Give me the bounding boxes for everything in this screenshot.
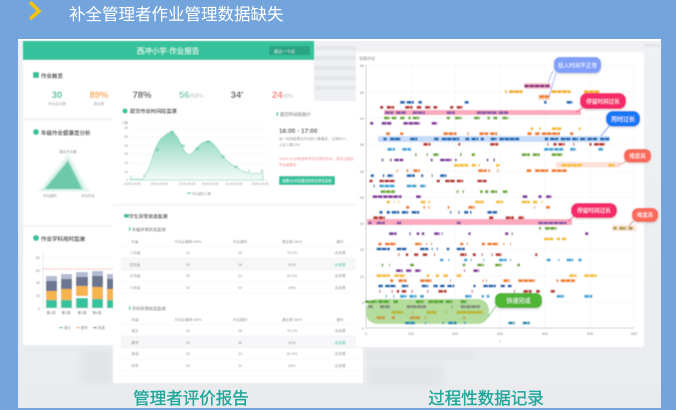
area chart: submission time: 0 xyxy=(126,178,128,182)
table: subject anomalies: 28 xyxy=(238,329,242,333)
table: grade anomalies: 69% xyxy=(288,286,296,290)
heading: top title xyxy=(30,2,284,24)
area chart: submission time: 7 xyxy=(248,169,250,173)
area chart: submission time: 人数 xyxy=(122,120,129,125)
stats overview: 作业概览 xyxy=(41,72,64,80)
callout: abnormal start time xyxy=(548,57,601,97)
chart grid and axes: 15 xyxy=(360,248,364,252)
table: subject anomalies: 34 xyxy=(238,341,242,345)
callout: long dwell time lower: 停留时间过长 xyxy=(577,206,611,214)
table: grade anomalies: 去处理 xyxy=(335,285,346,290)
caption: management report: 管理者评价报告 xyxy=(133,389,249,408)
stacked bar chart: 40 xyxy=(36,281,40,285)
highlight bands xyxy=(366,83,636,324)
table: grade anomalies: 平均正确率<60% xyxy=(174,239,202,244)
table: grade anomalies: 三年级 xyxy=(130,250,141,255)
table: grade anomalies: 34 xyxy=(238,263,242,267)
table: grade anomalies: 35 xyxy=(186,274,190,278)
table: subject anomalies: 英语 xyxy=(131,351,139,356)
stats overview: 78% xyxy=(132,90,152,101)
callout: too long duration xyxy=(601,111,640,136)
callout: long dwell time lower xyxy=(568,203,617,221)
submission time stats: 占总人数22% xyxy=(279,142,300,147)
area chart: submission time: 8 xyxy=(261,169,263,173)
table: subject anomalies: 34 xyxy=(186,341,190,345)
area chart: submission time xyxy=(122,107,269,196)
chart grid and axes: 0 xyxy=(365,332,367,336)
area chart: submission time: 35 xyxy=(155,148,159,152)
submission time stats: 作业量是否 xyxy=(279,162,297,167)
table: subject anomalies: 提交率<80% xyxy=(282,317,303,322)
area chart: submission time: 1 xyxy=(130,175,132,179)
panel: process data scatter chart xyxy=(356,52,658,347)
stacked bar chart: 60 xyxy=(36,269,40,273)
area chart: submission time: 40 xyxy=(124,144,128,148)
callout: difficulty high: 难度高 xyxy=(629,152,646,160)
stacked bar chart: 第4周 xyxy=(92,310,102,315)
table: grade anomalies: 91 xyxy=(186,251,190,255)
header bar: 最近一个月 xyxy=(274,48,295,55)
table: grade anomalies: 62% xyxy=(288,263,296,267)
area chart: submission time: 作业提交人数 xyxy=(192,191,212,196)
stacked bar chart: 20 xyxy=(36,294,40,298)
table: subject anomalies: 33 xyxy=(238,352,242,356)
table: grade anomalies: 62.4% xyxy=(287,274,298,278)
table: subject anomalies: 62.4% xyxy=(287,352,298,356)
chart grid and axes: t xyxy=(499,339,501,343)
callout: difficulty high lower: 难度高 xyxy=(637,211,654,219)
stacked bar chart: 数学 xyxy=(81,325,88,330)
callout: difficulty high lower xyxy=(629,208,658,226)
radar chart: 作业超时 xyxy=(43,193,57,198)
icon: yellow chevron xyxy=(30,2,39,19)
stacked bar chart: 语文 xyxy=(64,325,71,330)
area chart: submission time: 60 xyxy=(124,126,128,130)
chart grid and axes: 0 xyxy=(362,327,364,331)
radar chart: 年级作业健康度分析 xyxy=(41,129,91,137)
chart grid and axes: 50 xyxy=(360,64,364,68)
table: grade anomalies: 去处理 xyxy=(335,250,346,255)
table: grade anomalies: 33 xyxy=(238,274,242,278)
table: subject anomalies: 去处理 xyxy=(335,340,346,345)
panel: management report back card xyxy=(23,41,314,345)
scatter ticks lower rows xyxy=(365,207,633,323)
chart grid and axes: 10 xyxy=(360,275,364,279)
header bar xyxy=(23,41,314,60)
table: subject anomalies: 作业超时 xyxy=(233,317,248,322)
table: subject anomalies: 34 xyxy=(238,364,242,368)
table: subject anomalies: 去处理 xyxy=(335,351,346,356)
area chart: submission time: 13:00-14:00 xyxy=(123,182,141,186)
table: grade anomalies: 34 xyxy=(238,286,242,290)
table: subject anomalies: 语文 xyxy=(131,328,139,333)
table: subject anomalies: 操作 xyxy=(336,317,344,322)
submission time stats: 16:00 - 17:00 xyxy=(279,128,318,135)
chart grid and axes: 35 xyxy=(360,143,364,147)
chart grid and axes: 100 xyxy=(408,332,414,336)
stacked bar chart: 英语 xyxy=(98,325,105,330)
stats overview: 34' xyxy=(231,90,243,101)
area chart: submission time: 56 xyxy=(170,130,174,134)
table: grade anomalies: 操作 xyxy=(336,239,344,244)
table: subject anomalies: 34 xyxy=(186,364,190,368)
caption: process data: 过程性数据记录 xyxy=(428,389,544,408)
submission time stats: 23:00-24:00依然有学生在提交作业，请关注相关 xyxy=(279,156,354,161)
stats overview: 提交率 xyxy=(94,101,105,106)
stacked bar chart: 80 xyxy=(36,256,40,260)
table: grade anomalies: 学生异常状态监测 xyxy=(129,213,168,220)
panel: management report front card xyxy=(113,101,363,383)
table: grade anomalies: 去处理 xyxy=(335,262,346,267)
stacked bar chart: 作业学科用时监测 xyxy=(41,235,86,243)
area chart: submission time: 15:00-16:00 xyxy=(150,182,168,186)
stacked bar chart: 第3周 xyxy=(77,310,87,315)
callout: fast completion xyxy=(488,293,542,317)
table: grade anomalies: 34 xyxy=(186,286,190,290)
submission time stats: 这一时间段提交作业的人数最多，达到59人， xyxy=(279,136,349,141)
table: subject anomalies: 35 xyxy=(186,352,190,356)
callout: long dwell time: 停留时间过长 xyxy=(586,98,620,106)
submission time stats: 提交时间段统计 xyxy=(280,111,311,118)
radar chart: 作业作业 xyxy=(81,193,95,198)
chart grid and axes: 600 xyxy=(631,332,637,336)
callout: abnormal start time: 投入时间不正常 xyxy=(558,62,597,70)
area chart: submission time: 17:00-18:00 xyxy=(178,182,196,186)
chart grid and axes: 25 xyxy=(360,196,364,200)
stats overview: 89% xyxy=(89,90,109,101)
stacked bar chart: 第2周 xyxy=(61,310,71,315)
stacked bar chart: 0 xyxy=(38,307,40,311)
area chart: submission time: 21:00-22:00 xyxy=(225,182,243,186)
area chart: submission time: 45 xyxy=(206,140,210,144)
table: grade anomalies: 四年级 xyxy=(130,262,141,267)
submission time stats xyxy=(276,111,354,185)
table: subject anomalies: 去处理 xyxy=(335,328,346,333)
radar chart: 题目不合格 xyxy=(60,149,77,154)
table: grade anomalies: 34 xyxy=(186,263,190,267)
area chart: submission time: 26 xyxy=(221,155,225,159)
chart grid and axes: 45 xyxy=(360,91,364,95)
callout: fast completion: 快速完成 xyxy=(506,297,531,305)
area chart: submission time: 16 xyxy=(234,165,238,169)
table: subject anomalies: 数学 xyxy=(131,340,139,345)
callout: long dwell time xyxy=(576,93,626,112)
table: subject anomalies: 91 xyxy=(186,329,190,333)
table: subject anomalies: 学科异常状态监测 xyxy=(132,305,166,312)
chart grid and axes: 200 xyxy=(452,332,458,336)
table: grade anomalies: 年级异常状态监测 xyxy=(132,226,166,233)
table: grade anomalies: 五年级 xyxy=(130,273,141,278)
area chart: submission time: 38 xyxy=(195,147,199,151)
chart grid and axes xyxy=(360,64,637,343)
table: subject anomalies xyxy=(121,305,363,371)
area chart: submission time: 19:00-20:00 xyxy=(201,182,219,186)
table: subject anomalies: 75.2% xyxy=(287,329,298,333)
table: grade anomalies xyxy=(121,213,363,293)
area chart: submission time: 提交作业时间段监测 xyxy=(130,107,177,115)
area chart: submission time: 10 xyxy=(124,170,128,174)
stats overview: 24/8% xyxy=(272,90,294,101)
stacked bar chart xyxy=(33,235,114,330)
table: grade anomalies: 作业超时 xyxy=(233,239,248,244)
table: grade anomalies: 28 xyxy=(238,251,242,255)
area chart: submission time: 23:00-24:00 xyxy=(251,182,269,186)
heading: top title: 补全管理者作业管理数据缺失 xyxy=(69,5,284,24)
callout: difficulty high xyxy=(619,149,651,165)
area chart: submission time: 1 xyxy=(143,174,145,178)
stats overview xyxy=(33,72,294,106)
stats overview: 作业总天数 xyxy=(48,101,66,106)
radar chart xyxy=(33,129,95,198)
chart grid and axes: 400 xyxy=(542,332,548,336)
area chart: submission time: 30 xyxy=(124,152,128,156)
stats overview: 30 xyxy=(52,90,62,101)
panel: process data scatter chart: 答题序程 xyxy=(359,55,375,61)
table: subject anomalies: 年级 xyxy=(131,317,139,322)
table: subject anomalies: 科学 xyxy=(131,363,139,368)
chart grid and axes: 30 xyxy=(360,170,364,174)
table: grade anomalies: 75.2% xyxy=(287,251,298,255)
chart grid and axes: 500 xyxy=(587,332,593,336)
table: grade anomalies: 去处理 xyxy=(335,273,346,278)
stats overview: 56/58% xyxy=(179,90,204,101)
table: subject anomalies: 69% xyxy=(288,364,296,368)
callout: too long duration: 用时过长 xyxy=(611,116,635,124)
chart grid and axes: 300 xyxy=(497,332,503,336)
table: grade anomalies: 提交率<80% xyxy=(282,239,303,244)
area chart: submission time: 50 xyxy=(124,135,128,139)
scatter ticks upper rows xyxy=(369,86,615,202)
stacked bar chart: 第1周 xyxy=(46,310,56,315)
table: grade anomalies: 年级 xyxy=(131,239,139,244)
header bar: 西冲小学·作业报告 xyxy=(137,46,200,56)
area chart: submission time: 20 xyxy=(124,161,128,165)
chart grid and axes: 5 xyxy=(362,301,364,305)
table: subject anomalies: 平均正确率<60% xyxy=(174,317,202,322)
chart grid and axes: 20 xyxy=(360,222,364,226)
submission time stats: 查看23:00后提交的作业学生名单 xyxy=(282,178,332,183)
area chart: submission time: 40 xyxy=(181,144,185,148)
table: subject anomalies: 去处理 xyxy=(335,363,346,368)
table: subject anomalies: 62% xyxy=(288,341,296,345)
table: grade anomalies: 六年级 xyxy=(130,285,141,290)
chart grid and axes: 40 xyxy=(360,117,364,121)
